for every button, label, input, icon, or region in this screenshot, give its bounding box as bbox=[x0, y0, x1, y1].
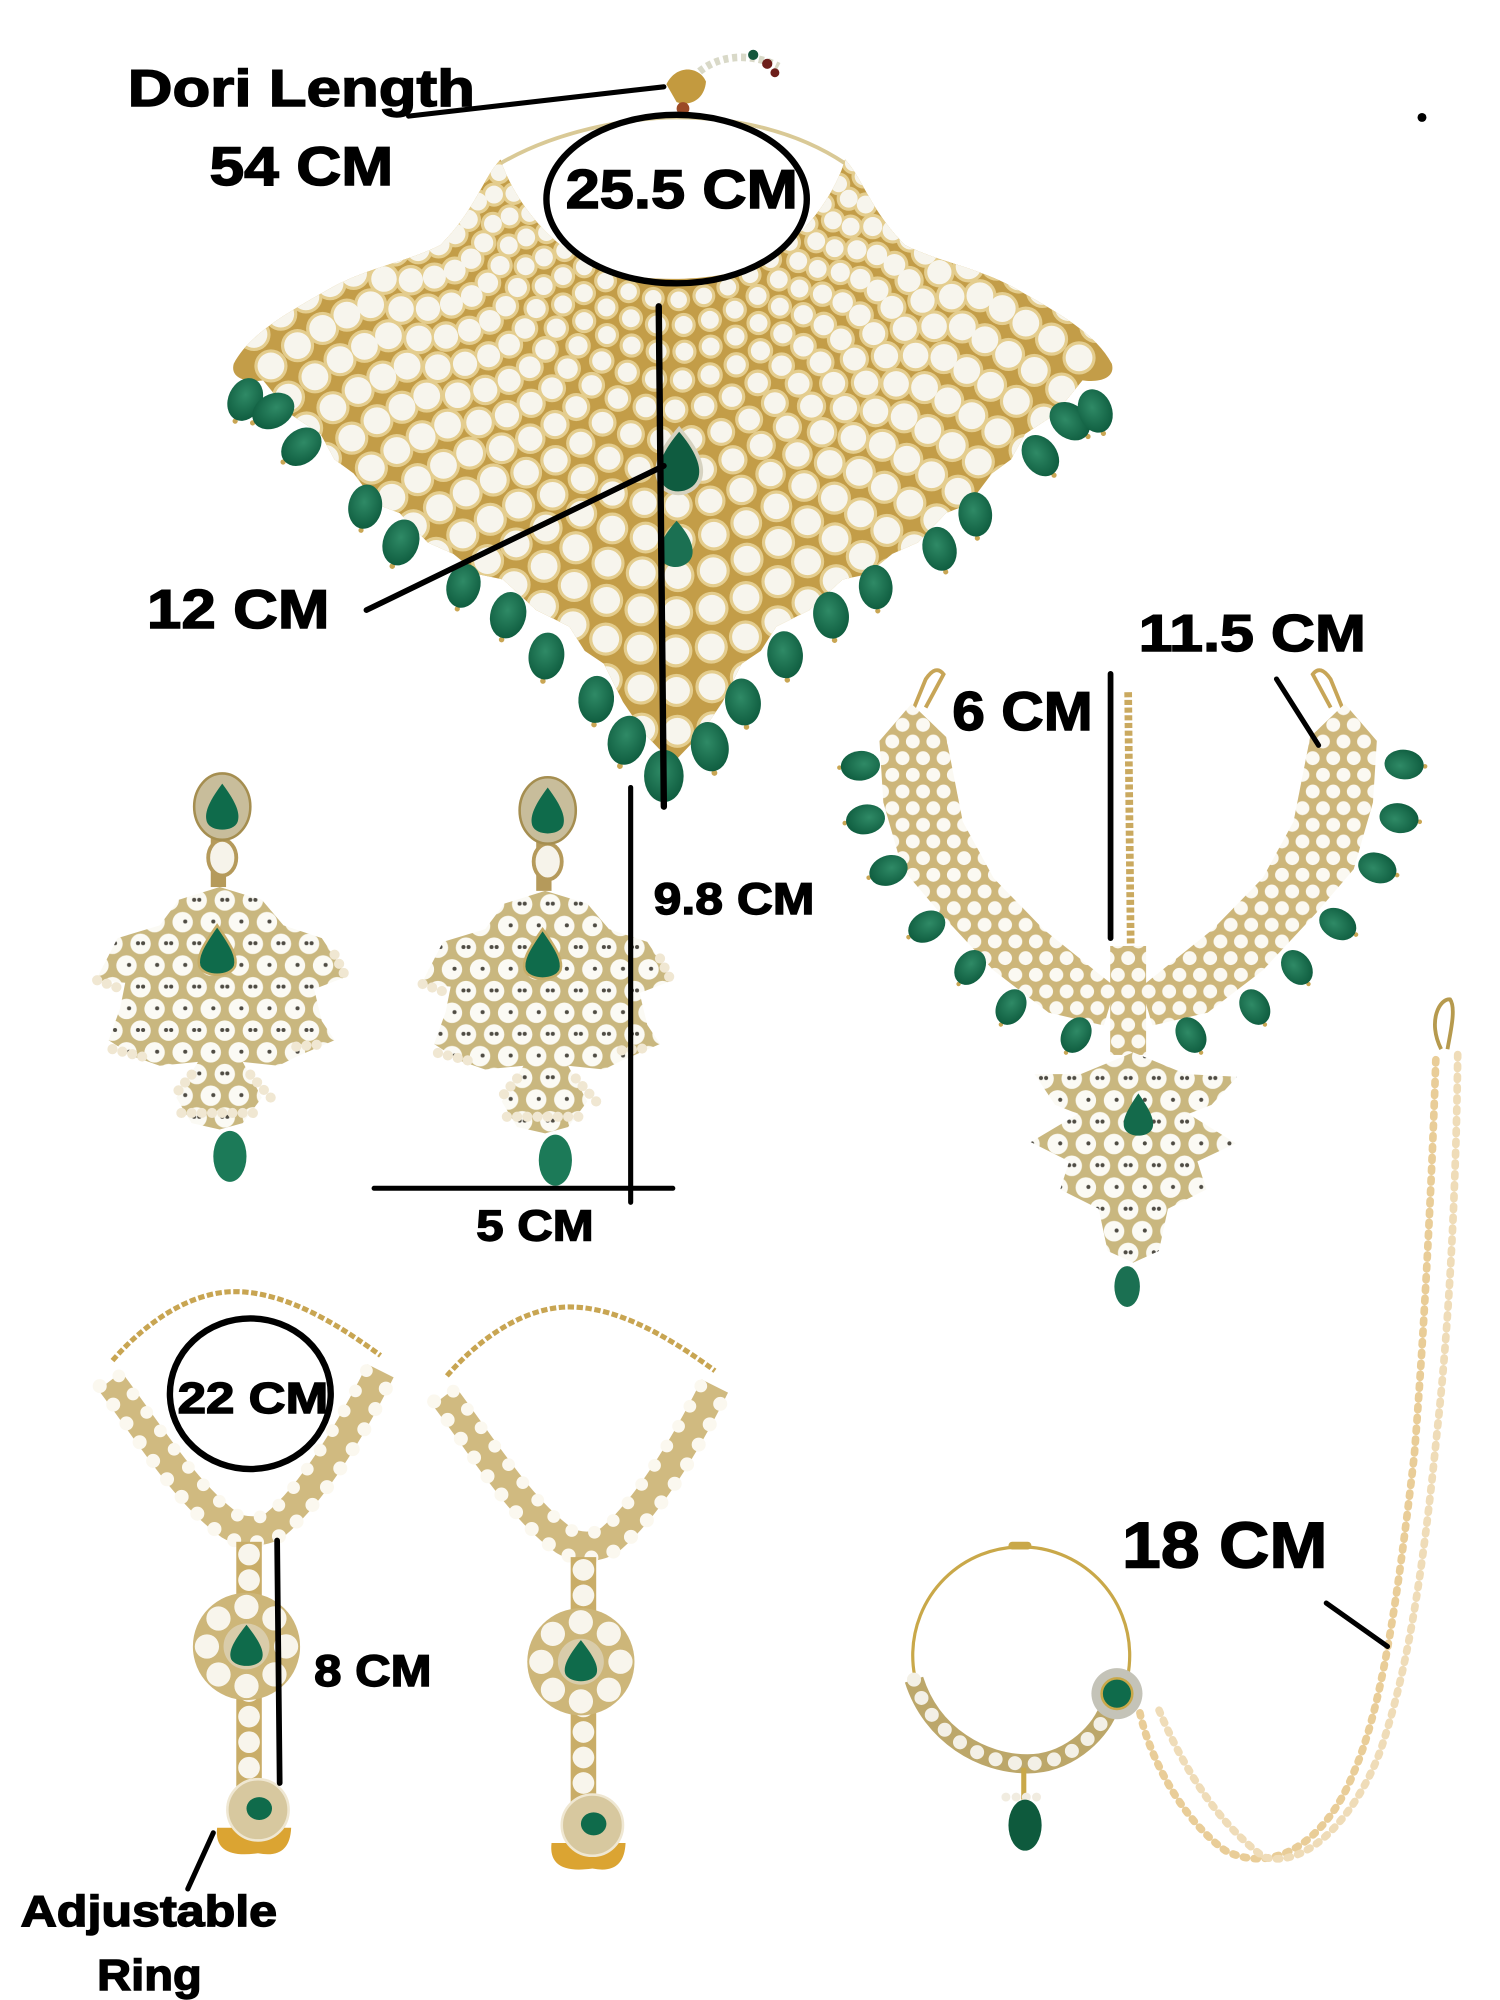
ring bbox=[913, 1547, 1130, 1764]
label: neck 25.5 cm: 25.5 CM bbox=[566, 158, 798, 220]
pendant bbox=[1031, 1052, 1237, 1263]
label: dori 54 cm: 54 CM bbox=[209, 135, 393, 197]
left hath phool bbox=[100, 1292, 393, 1854]
label: 5 cm: 5 CM bbox=[476, 1203, 594, 1251]
kundan stones bbox=[246, 160, 1092, 745]
label: adjustable: Adjustable bbox=[21, 1888, 277, 1936]
dori length leader bbox=[409, 87, 664, 116]
label: 6 cm: 6 CM bbox=[952, 680, 1093, 742]
measurement lines bbox=[170, 87, 1388, 1889]
bands and pendant bbox=[879, 670, 1377, 1263]
chain hook bbox=[1435, 999, 1453, 1049]
emerald beads bbox=[836, 748, 1429, 1062]
label: 9.8 cm: 9.8 CM bbox=[654, 875, 814, 924]
nose chain leader bbox=[1326, 1603, 1388, 1646]
hanging stem bbox=[1022, 1768, 1026, 1800]
right hath phool bbox=[434, 1307, 728, 1870]
right band bbox=[1141, 704, 1377, 1025]
nath nose ring bbox=[913, 999, 1458, 1859]
flower centre bbox=[1102, 1678, 1132, 1709]
headpiece chain line bbox=[1108, 674, 1113, 938]
label: 12 cm: 12 CM bbox=[147, 578, 329, 640]
hook left bbox=[914, 670, 944, 708]
central green drops bbox=[657, 429, 701, 567]
headpiece side leader bbox=[1276, 679, 1319, 745]
pearl chain strand two bbox=[1159, 1053, 1458, 1859]
necklace height line bbox=[659, 306, 664, 807]
stone settings bbox=[244, 160, 1096, 748]
pearl chain strand one bbox=[1140, 1053, 1436, 1859]
gold base bbox=[217, 140, 1123, 779]
earring height line bbox=[629, 787, 633, 1202]
emerald beads bbox=[219, 372, 1120, 807]
hook right bbox=[1313, 670, 1342, 708]
hanging pearls bbox=[1006, 1794, 1044, 1801]
kundan body clipped to necklace outline bbox=[233, 160, 1112, 758]
label: 22 cm: 22 CM bbox=[178, 1375, 328, 1423]
sheesh patti headpiece bbox=[836, 670, 1429, 1307]
pendant centre stone bbox=[1124, 1093, 1153, 1136]
left band bbox=[879, 704, 1115, 1025]
earring width line bbox=[374, 1186, 673, 1190]
pendant bead bbox=[1114, 1266, 1140, 1307]
center connector bbox=[1110, 946, 1146, 1055]
kundan stones bbox=[914, 1680, 1108, 1764]
stray dot bbox=[1418, 113, 1426, 122]
main necklace bbox=[227, 50, 1113, 805]
hand harness length line bbox=[277, 1541, 280, 1783]
label: 11.5 cm: 11.5 CM bbox=[1139, 605, 1366, 663]
label: ring: Ring bbox=[97, 1952, 202, 2000]
center chain bbox=[1128, 692, 1131, 946]
hanging bead bbox=[1008, 1800, 1042, 1851]
right earring bbox=[421, 777, 673, 1186]
left earring bbox=[96, 773, 347, 1182]
label: 18 cm: 18 CM bbox=[1122, 1508, 1328, 1581]
dori cord bbox=[500, 117, 845, 163]
necklace width leader bbox=[366, 466, 664, 610]
dori knot and tassel bbox=[666, 50, 779, 115]
hand harness circle bbox=[170, 1318, 331, 1469]
ring leader bbox=[188, 1833, 213, 1889]
label: 8 cm: 8 CM bbox=[314, 1647, 432, 1696]
flower stone bbox=[1091, 1668, 1142, 1719]
neck circumference ellipse bbox=[546, 115, 807, 283]
label: dori length: Dori Length bbox=[128, 60, 475, 118]
ring clasp bbox=[1008, 1542, 1031, 1549]
kundan arc bbox=[914, 1680, 1108, 1764]
